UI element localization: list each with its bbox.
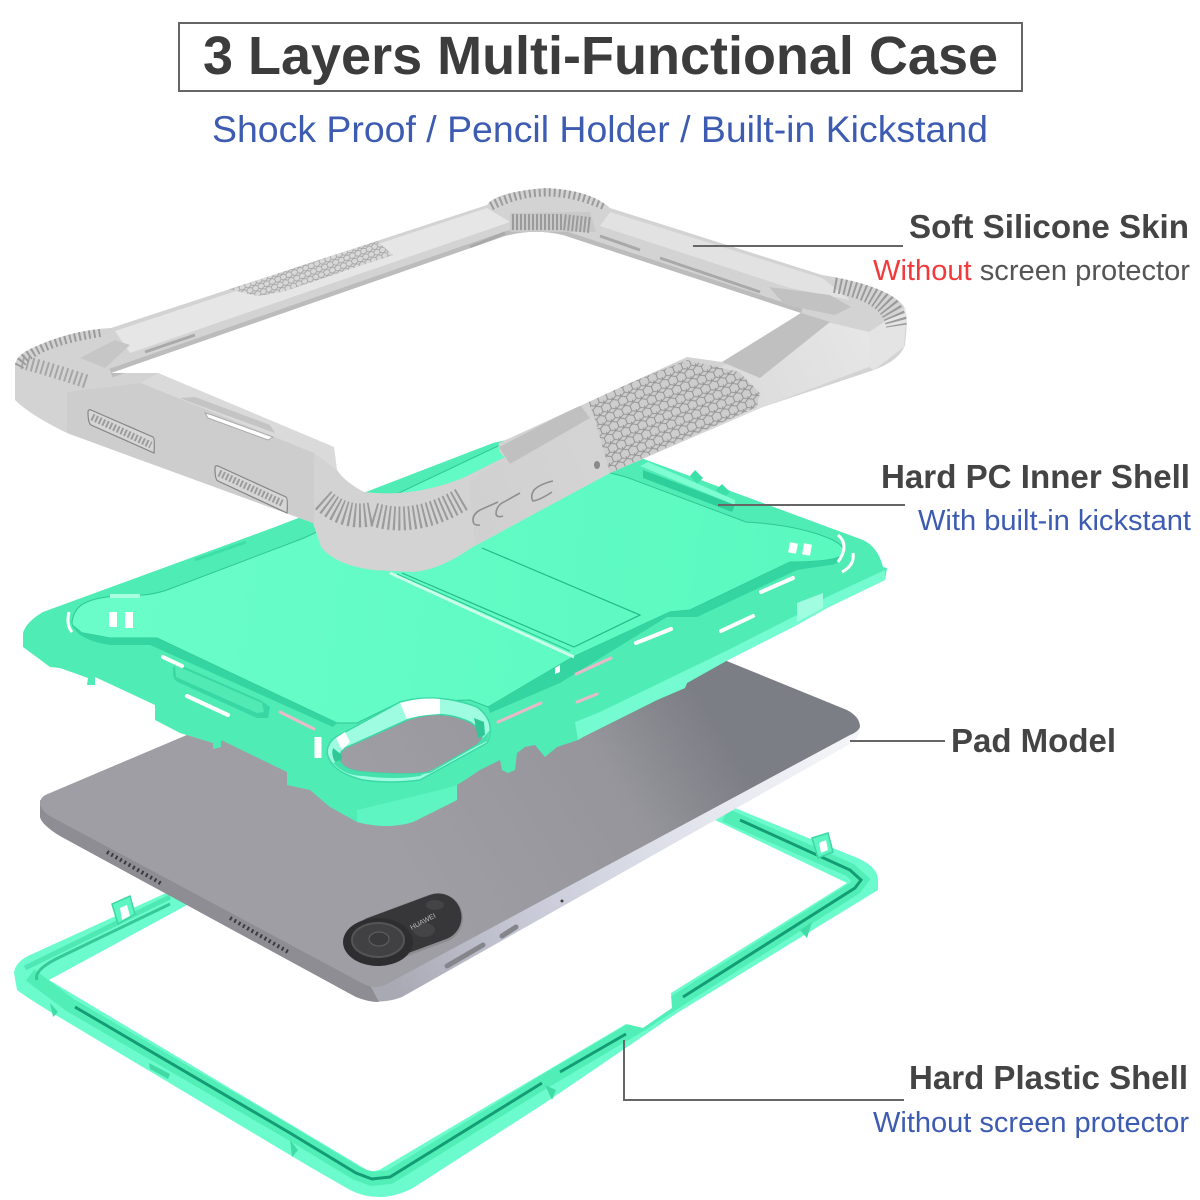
title: 3 Layers Multi-Functional Case <box>203 26 998 86</box>
callout: hard PC inner shell <box>718 458 1191 537</box>
near left band <box>68 433 314 526</box>
callout: soft silicone skin <box>693 208 1190 287</box>
icon: camera module: HUAWEI <box>409 913 437 932</box>
callout: pad model: Pad Model <box>951 722 1116 759</box>
grip texture: near <box>587 360 760 473</box>
callout: soft silicone skin: Without screen protector <box>873 255 1190 287</box>
top edge detail <box>195 542 246 560</box>
tabs on plastic shell <box>112 833 833 924</box>
upper rim highlight <box>115 208 510 353</box>
icon: camera module <box>343 900 444 966</box>
callout: hard plastic shell: Hard Plastic Shell <box>909 1059 1188 1096</box>
shell body with camera hole <box>23 428 887 826</box>
lower plate rim <box>72 624 337 727</box>
layer: hard plastic shell <box>14 808 878 1197</box>
pencil holder bar <box>643 470 735 512</box>
layer: pad model <box>40 585 860 1002</box>
callout: hard PC inner shell: With built-in kickstant <box>918 505 1191 537</box>
grip texture: far <box>223 240 393 296</box>
speaker windows <box>88 410 287 513</box>
lighter lower lip <box>575 570 885 740</box>
side buttons <box>447 927 516 966</box>
callout: hard plastic shell <box>624 1040 1189 1139</box>
layer: soft silicone skin <box>15 188 907 572</box>
speaker grilles <box>107 852 290 953</box>
near right band <box>504 322 869 488</box>
frame body <box>15 188 907 572</box>
kickstand outline <box>390 548 640 657</box>
hole slots <box>314 737 322 758</box>
subtitle: Shock Proof / Pencil Holder / Built-in Kickstand <box>212 109 988 150</box>
callout: hard PC inner shell: Hard PC Inner Shell <box>881 458 1190 495</box>
camera ring <box>327 698 490 782</box>
layer: hard PC inner shell <box>23 428 887 826</box>
white slits <box>163 578 793 715</box>
raised plate <box>72 445 844 723</box>
callout: soft silicone skin: Soft Silicone Skin <box>909 208 1189 245</box>
corner slots <box>113 543 808 628</box>
callout: hard plastic shell: Without screen protector <box>873 1107 1189 1139</box>
left handle <box>173 665 270 718</box>
side buttons <box>473 481 553 525</box>
pad body and side <box>40 716 860 1002</box>
rib texture <box>18 192 897 518</box>
port slits <box>205 413 273 440</box>
